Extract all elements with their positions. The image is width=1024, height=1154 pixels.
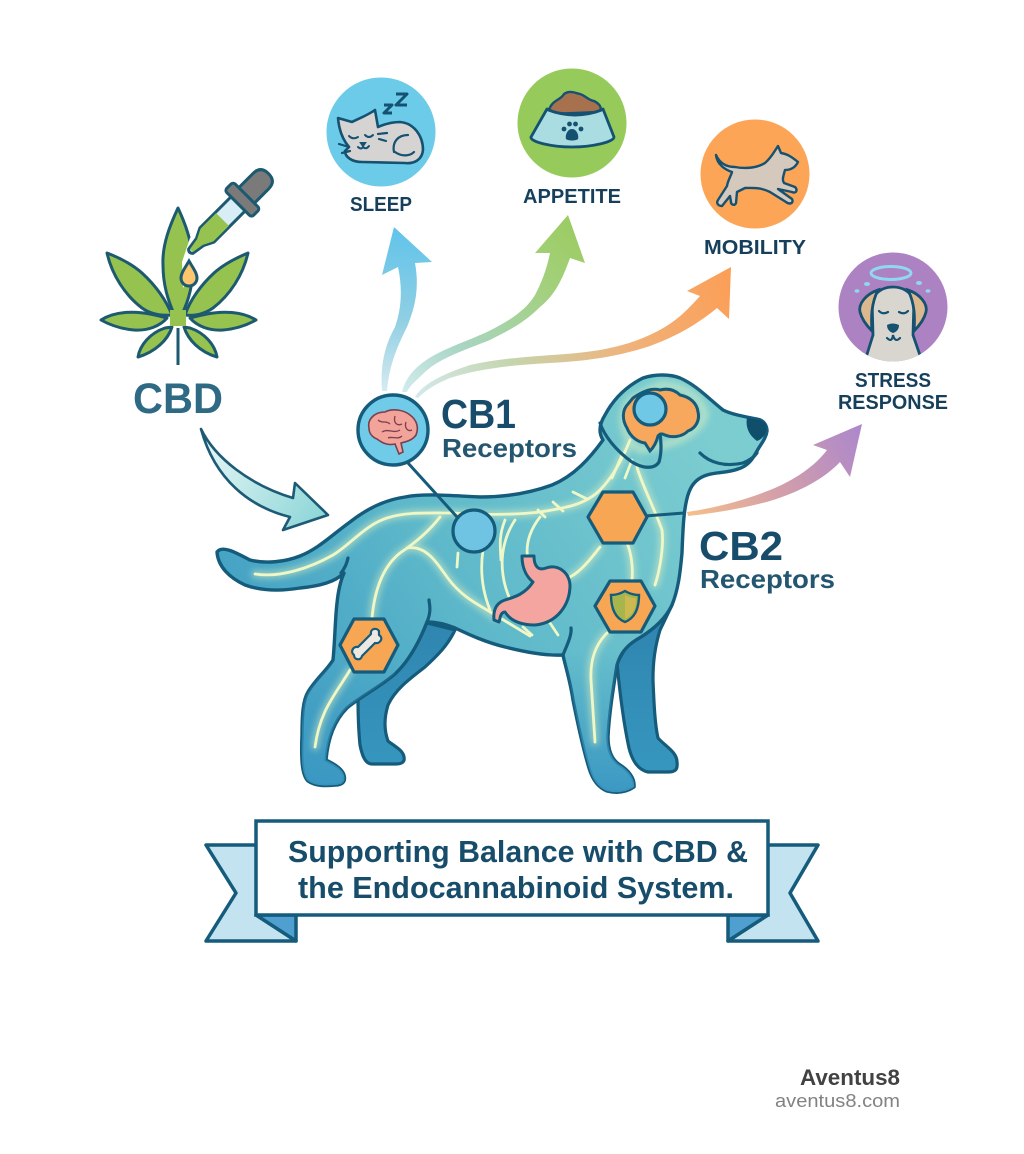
nervous system lines: [255, 440, 663, 747]
heading: CB1: CB1: [441, 391, 516, 437]
label: sleep: SLEEP: [350, 194, 412, 216]
ear and head detail: [600, 423, 757, 467]
icon: brain callout: [358, 395, 428, 465]
connector: CB1 to body: [408, 463, 457, 517]
panel: CB2 receptors: [699, 523, 835, 594]
footer: brand: [775, 1065, 900, 1111]
receptor: body CB1: [453, 510, 495, 552]
arrow: to appetite: [402, 215, 585, 392]
arrow: to stress response: [687, 424, 862, 516]
icon: sleeping cat: [326, 78, 436, 186]
label: appetite: APPETITE: [523, 186, 621, 208]
banner title: Supporting Balance with CBD &: [288, 834, 748, 869]
icon: food bowl: [518, 68, 626, 178]
illustration: dog with endocannabinoid system: [217, 375, 767, 792]
banner box: [256, 821, 768, 915]
far front leg: [617, 605, 677, 772]
banner: [206, 821, 818, 941]
label: stress response: [838, 370, 948, 414]
label: receptors: Receptors: [700, 564, 835, 594]
receptor: CB2 hexagon: [588, 492, 647, 543]
far hind leg: [358, 623, 455, 764]
receptor: shield hexagon: [595, 581, 655, 632]
footer: brand: Aventus8: [800, 1065, 900, 1090]
heading: CB2: CB2: [699, 523, 783, 569]
panel: appetite: [518, 68, 626, 208]
panel: stress response: [838, 252, 948, 414]
panel: sleep: [326, 78, 436, 216]
receptor: bone hexagon: [340, 619, 398, 672]
arrow: to mobility: [415, 267, 731, 398]
banner title: [288, 834, 748, 905]
infographic: CBD and the endocannabinoid system in dogs: [99, 68, 948, 1107]
panel: CB1 receptors: [358, 391, 577, 465]
heading: CBD: CBD: [133, 375, 223, 423]
panel: mobility: [700, 120, 810, 259]
icon: dog brain: [623, 389, 699, 451]
nose: [747, 418, 766, 441]
label: stress response: STRESS: [855, 370, 931, 392]
icon: stomach: [494, 556, 570, 625]
haunch and shoulder creases: [341, 558, 571, 655]
dog body: [217, 375, 767, 792]
icon: cannabis leaf: [101, 208, 256, 365]
arrow: to sleep: [382, 227, 432, 391]
footer: brand: aventus8.com: [775, 1091, 900, 1111]
icon: calm dog with halo: [838, 252, 948, 364]
nervous system glow: [255, 385, 705, 747]
banner title: the Endocannabinoid System.: [298, 870, 734, 905]
icon: dropper and drop: [176, 160, 282, 288]
label: mobility: MOBILITY: [704, 237, 807, 259]
receptor: head: [634, 393, 666, 425]
arrow: CBD to dog: [201, 429, 328, 530]
shading on lower legs: [302, 650, 634, 792]
ribbon tails: [206, 845, 818, 941]
icon: running dog: [700, 120, 810, 228]
connector: CB2 to hexagon: [645, 513, 684, 516]
label: stress response: RESPONSE: [838, 392, 948, 414]
label: receptors: Receptors: [442, 433, 577, 463]
